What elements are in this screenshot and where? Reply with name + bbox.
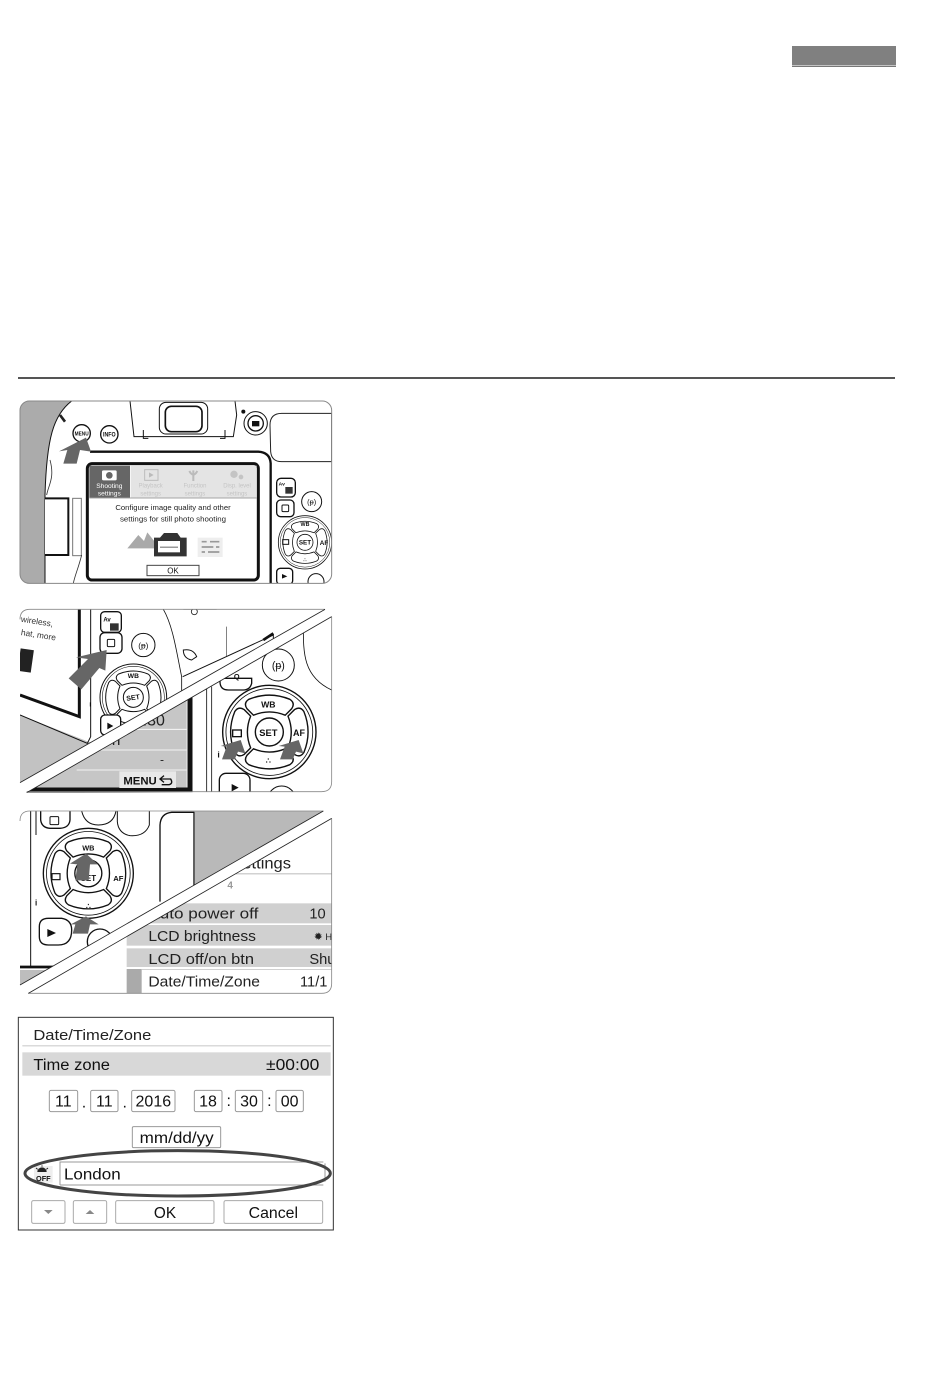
menu tab title: Settings: [231, 855, 291, 872]
upper half: cross keys: WB: [82, 844, 94, 853]
lower half: cross keys and LCD: AF: [293, 728, 305, 738]
bottom buttons: Cancel: [249, 1205, 298, 1222]
time zone row: Time zone: [33, 1057, 110, 1074]
menu rows: 10: [309, 907, 326, 923]
menu rows: 11/1: [300, 975, 327, 991]
arrow: down key: [71, 916, 99, 934]
menu rows: LCD brightness: [148, 929, 256, 945]
LCD screen: quick guide: Function: [184, 484, 206, 490]
time zone row: [22, 1052, 331, 1076]
daylight saving icon: OFF: [36, 1174, 51, 1183]
MENU back label: [119, 771, 176, 788]
arrow: press Q: [69, 650, 107, 689]
menu rows: LCD off/on btn: [148, 952, 254, 968]
date and time fields: :: [226, 1093, 231, 1110]
upper half: cross keys: [20, 811, 323, 985]
menu rows: Date/Time/Zone: [148, 975, 260, 991]
lower half: cross keys and LCD: on: [103, 732, 120, 749]
menu rows: H: [325, 932, 332, 942]
LCD screen: quick guide: Disp. level: [223, 484, 251, 490]
camera buttons right of screen: Av: [279, 482, 285, 488]
upper half: cross keys: ∴: [86, 901, 91, 910]
arrow: up key: [70, 854, 98, 880]
page tab marker: [792, 46, 896, 67]
lower half: cross keys and LCD: -: [160, 752, 164, 766]
arrow: press MENU: [59, 438, 91, 464]
menu rows: Shu: [309, 952, 335, 968]
date and time fields: [49, 1090, 303, 1112]
LCD screen: quick guide: Playback: [139, 484, 163, 490]
date format button: mm/dd/yy: [140, 1130, 214, 1147]
upper half: Q button: wireless,: [19, 614, 54, 629]
camera buttons right of screen: WB: [301, 522, 310, 528]
date and time fields: 11: [55, 1094, 72, 1111]
MENU button: MENU: [75, 432, 89, 438]
location field: London: [60, 1162, 325, 1185]
MENU back label: MENU: [123, 775, 157, 787]
screen title: Date/Time/Zone: [33, 1027, 151, 1044]
LCD screen: quick guide: Configure image quality and other: [115, 503, 231, 512]
MENU button: [73, 425, 90, 442]
time zone row: ±00:00: [266, 1057, 319, 1074]
lower half: cross keys and LCD: (ᵽ): [272, 660, 285, 672]
upper half: cross keys: i: [35, 899, 37, 908]
bottom buttons: [32, 1201, 323, 1223]
LCD screen: quick guide: [87, 464, 258, 580]
camera buttons right of screen: [277, 478, 332, 590]
lower half: cross keys and LCD: WB: [261, 699, 276, 709]
camera buttons right of screen: AF: [320, 540, 328, 547]
upper half: Q button: (ᵽ): [138, 640, 149, 650]
INFO button: [101, 426, 118, 443]
menu rows: ✹: [314, 931, 323, 943]
lower half: cross keys and LCD: Q: [234, 672, 240, 681]
daylight saving icon: [34, 1165, 53, 1183]
menu rows: Auto power off: [148, 907, 259, 923]
upper half: Q button: i: [89, 702, 91, 709]
highlight ellipse: [25, 1151, 330, 1196]
date and time fields: 2016: [136, 1094, 171, 1111]
arrow: left key: [221, 740, 245, 759]
date and time fields: 11: [96, 1094, 113, 1111]
LCD screen: quick guide: settings: [185, 492, 205, 498]
camera buttons right of screen: ∴: [303, 558, 307, 564]
upper half: Q button: Av: [103, 618, 111, 624]
lower half: cross keys and LCD: i: [217, 749, 220, 759]
LCD screen: quick guide: Shooting: [96, 483, 123, 490]
LCD screen: quick guide: settings: [98, 491, 121, 498]
date and time fields: 30: [240, 1094, 258, 1111]
panel: step 4 Date/Time/Zone screen: [18, 1017, 333, 1230]
date and time fields: 00: [281, 1094, 299, 1111]
lower half: cross keys and LCD: ∴: [266, 756, 271, 765]
date and time fields: .: [82, 1094, 86, 1111]
section divider: [18, 377, 895, 379]
lower half: cross keys and LCD: SET: [259, 728, 278, 738]
lower half: cross keys and LCD: :30: [143, 713, 165, 730]
LCD screen: quick guide: settings: [227, 492, 247, 498]
date and time fields: :: [267, 1093, 272, 1110]
upper half: Q button: hat, more: [20, 627, 57, 643]
arrow: right key: [279, 740, 303, 759]
lower half: cross keys and LCD: [28, 633, 332, 792]
camera buttons right of screen: (ᵽ): [307, 497, 316, 506]
upper half: Q button: [20, 610, 274, 782]
camera buttons right of screen: SET: [299, 540, 311, 547]
upper half: Q button: WB: [128, 673, 139, 680]
upper half: cross keys: SET: [81, 874, 96, 883]
menu rows: [148, 907, 335, 991]
LCD screen: quick guide: OK: [167, 567, 179, 576]
panel: step 1 camera MENU button and quick guide screen: [20, 401, 332, 590]
INFO button: INFO: [103, 433, 116, 439]
LCD screen: quick guide: settings for still photo shooting: [120, 514, 226, 523]
panel: step 2 Q button then cross keys: [20, 608, 332, 793]
date format button: [132, 1127, 221, 1148]
location field: London: London: [64, 1166, 121, 1183]
LCD screen: quick guide: settings: [140, 492, 161, 498]
upper half: Q button: SET: [126, 694, 141, 703]
bottom buttons: OK: [154, 1205, 177, 1222]
date and time fields: .: [122, 1094, 127, 1111]
lower half: menu list: [126, 858, 332, 993]
upper half: cross keys: AF: [113, 874, 124, 883]
date and time fields: 18: [199, 1094, 217, 1111]
panel: step 3 select Date/Time/Zone: [20, 811, 335, 993]
lower half: menu list: 4: [227, 880, 233, 891]
